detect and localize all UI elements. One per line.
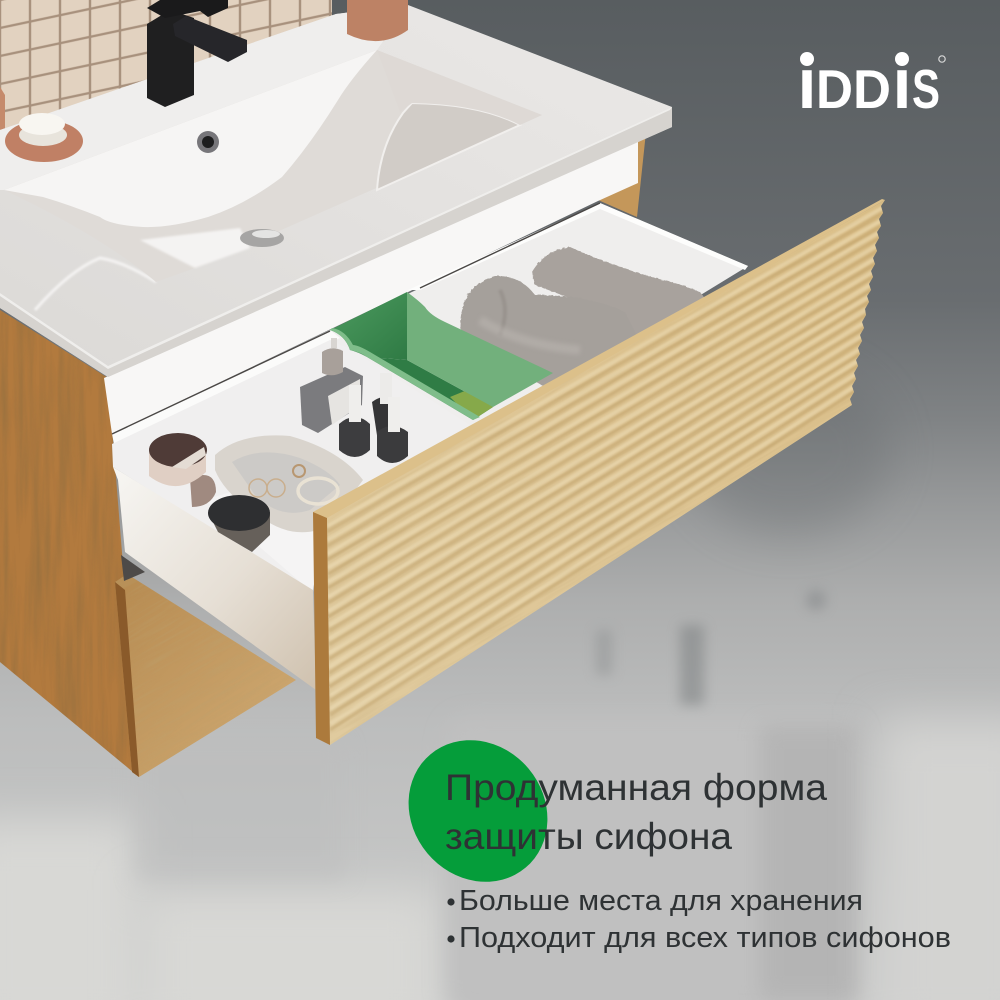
towels — [460, 247, 708, 392]
heading: защиты сифона — [445, 816, 732, 857]
perfume bottle — [300, 338, 363, 433]
drawer interior — [112, 203, 748, 592]
cream jars — [149, 433, 270, 552]
bullet list — [447, 885, 951, 954]
cabinet right edge — [598, 132, 646, 217]
drawer wooden ribbed front — [313, 199, 885, 745]
terracotta object at left edge — [0, 87, 5, 177]
jewellery tray — [215, 435, 363, 532]
heading: Продуманная форма — [445, 767, 827, 808]
bullet list: Больше места для хранения — [459, 885, 863, 917]
green siphon cover — [330, 292, 553, 420]
logo: IDDIS: I — [798, 58, 816, 120]
logo: IDDIS: I — [893, 58, 911, 120]
bullet list: Подходит для всех типов сифонов — [459, 922, 951, 954]
countertop with basin — [0, 5, 672, 377]
basin — [4, 50, 542, 282]
logo: IDDIS: D — [853, 58, 891, 120]
heading — [445, 767, 827, 857]
dark gap line above drawer — [112, 203, 600, 434]
lower drawer front — [115, 576, 296, 777]
soap dish — [5, 113, 83, 162]
logo: IDDIS: S — [912, 58, 940, 120]
drawer white side wall — [113, 467, 316, 690]
logo: IDDIS — [798, 52, 945, 120]
cabinet white front under counter — [104, 135, 638, 434]
cabinet left side panel — [0, 300, 145, 780]
dropper bottles — [339, 373, 408, 463]
logo: IDDIS: D — [816, 58, 853, 120]
overflow hole — [197, 131, 219, 153]
drain — [240, 229, 284, 247]
black faucet — [147, 0, 247, 107]
tiled wall — [0, 0, 332, 170]
green blob accent — [380, 712, 576, 910]
terracotta cup — [347, 0, 408, 41]
